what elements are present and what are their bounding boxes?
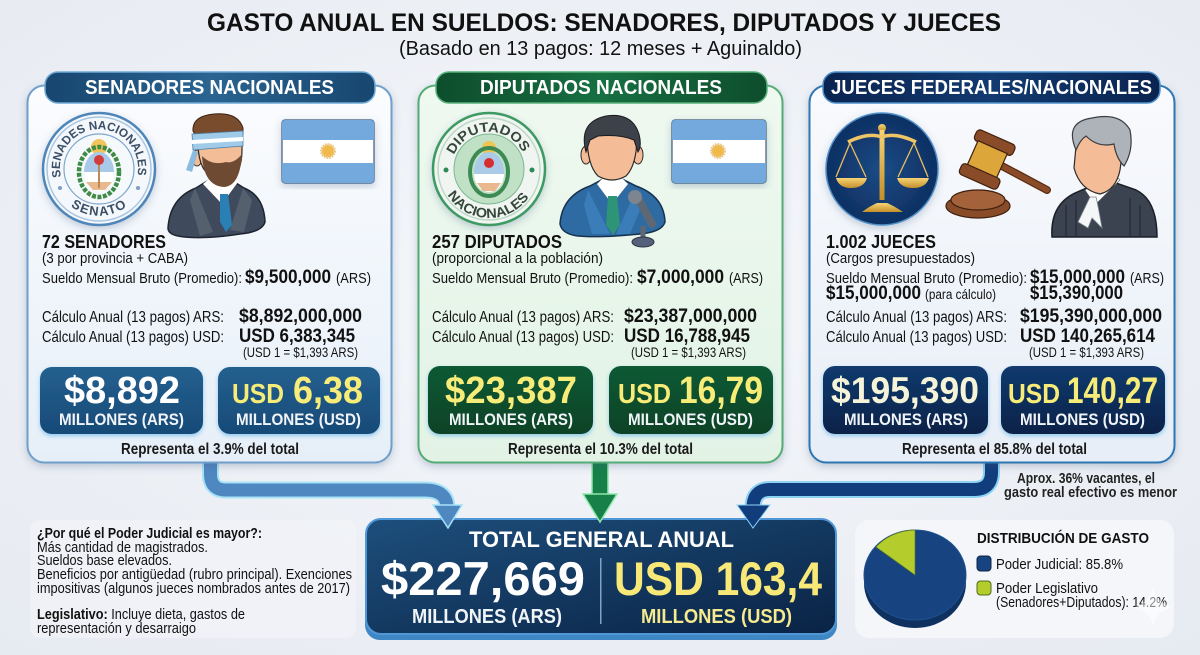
text: deputies annual calculation: Cálculo Anual (13 pagos) USD: xyxy=(432,329,614,346)
text: judges annual calculation xyxy=(826,306,1162,360)
stat: judges ARS xyxy=(823,366,988,434)
stat: total ARS: MILLONES (ARS) xyxy=(412,606,562,628)
stat: deputies ARS: $23,387 xyxy=(445,370,577,412)
legend: legislative: Poder Legislativo xyxy=(996,580,1098,597)
icon: senate seal: SENATO xyxy=(72,200,125,216)
stat: senators USD: 6,38 xyxy=(293,370,363,412)
stat: judges USD xyxy=(1001,366,1165,434)
icon: sparkle xyxy=(1134,587,1172,627)
text: senators monthly salary: Sueldo Mensual Bruto (Promedio): xyxy=(42,270,242,287)
stat: judges USD: MILLONES (USD) xyxy=(1020,410,1145,429)
text block: why the judiciary is higher: impositivas (algunos jueces nombrados antes de 2017) xyxy=(37,581,350,597)
text: deputies monthly salary xyxy=(432,267,763,288)
text: deputies annual calculation: $23,387,000,000 xyxy=(624,306,757,327)
text block: why the judiciary is higher: Sueldos base elevados. xyxy=(37,553,172,569)
stat: deputies USD: USD xyxy=(618,378,671,409)
text: senators monthly salary xyxy=(42,267,371,288)
stat: deputies ARS: MILLONES (ARS) xyxy=(449,410,573,429)
stat: total USD xyxy=(614,552,822,628)
note: vacancies xyxy=(1004,471,1177,501)
text: judges annual calculation: $195,390,000,000 xyxy=(1020,306,1162,327)
stat: senators ARS: MILLONES (ARS) xyxy=(59,410,184,429)
text: deputies count: 257 DIPUTADOS xyxy=(432,232,562,252)
note: vacancies: gasto real efectivo es menor xyxy=(1004,485,1177,501)
text: senators share: Representa el 3.9% del total xyxy=(121,441,299,458)
text: deputies monthly salary: Sueldo Mensual Bruto (Promedio): xyxy=(432,270,633,287)
text: senators annual calculation: $8,892,000,000 xyxy=(239,306,362,327)
text: senators annual calculation: (USD 1 = $1,393 ARS) xyxy=(243,344,358,360)
stat: total ARS xyxy=(381,552,585,628)
text: judges annual calculation: (USD 1 = $1,393 ARS) xyxy=(1029,344,1144,360)
icon: judge xyxy=(1052,116,1157,237)
panel: diputados xyxy=(413,71,788,470)
text: deputies share: Representa el 10.3% del total xyxy=(508,441,693,458)
text: judges monthly salary xyxy=(826,267,1164,304)
text: judges count: 1.002 JUECES xyxy=(826,232,936,252)
stat: senators ARS xyxy=(40,367,203,434)
header: jueces xyxy=(823,72,1160,103)
icon: scales of justice xyxy=(826,113,938,225)
panel: spending distribution xyxy=(855,520,1174,638)
text: deputies annual calculation: Cálculo Anual (13 pagos) ARS: xyxy=(432,309,614,326)
stat: total USD: USD 163,4 xyxy=(614,552,822,605)
text: senators annual calculation: Cálculo Anual (13 pagos) USD: xyxy=(42,329,224,346)
stat: judges ARS: $195,390 xyxy=(831,370,979,411)
stat: total ARS: $227,669 xyxy=(381,552,585,605)
header: jueces: JUECES FEDERALES/NACIONALES xyxy=(831,77,1152,99)
text: senators monthly salary: $9,500,000 xyxy=(245,267,331,288)
panel: senadores xyxy=(22,71,397,470)
text: deputies basis: (proporcional a la población) xyxy=(432,251,603,267)
legend: judicial: Poder Judicial: 85.8% xyxy=(996,556,1123,573)
stat: judges USD: 140,27 xyxy=(1067,370,1158,411)
header: diputados: DIPUTADOS NACIONALES xyxy=(480,77,722,99)
icon: deputies seal: NACIONALES xyxy=(448,190,528,218)
stat: senators ARS: $8,892 xyxy=(64,370,180,412)
stat: senators USD xyxy=(218,367,380,434)
panel: jueces xyxy=(810,72,1174,462)
stat: deputies USD: 16,79 xyxy=(679,370,763,412)
text: judges monthly salary: Sueldo Mensual Bruto (Promedio): xyxy=(826,270,1027,287)
text: judges monthly salary: (ARS) xyxy=(1130,271,1164,287)
text block: why the judiciary is higher: Beneficios por antigüedad (rubro principal). Exenciones xyxy=(37,567,352,583)
stat: deputies USD xyxy=(609,366,773,434)
text block: why the judiciary is higher: ¿Por qué el Poder Judicial es mayor?: xyxy=(37,526,262,542)
text: senators annual calculation xyxy=(42,306,362,360)
legend: legislative: (Senadores+Diputados): 14.2% xyxy=(996,595,1167,611)
text: judges annual calculation: Cálculo Anual (13 pagos) ARS: xyxy=(826,309,1007,326)
icon: argentine flag xyxy=(282,120,374,183)
heading: total: TOTAL GENERAL ANUAL xyxy=(469,527,734,552)
arrow: deputies to total xyxy=(583,458,617,522)
text block: why the judiciary is higher: Legislativo: Incluye dieta, gastos de xyxy=(37,607,245,623)
panel: total general xyxy=(365,519,837,640)
text: deputies annual calculation xyxy=(432,306,757,360)
text: judges monthly salary: $15,000,000 xyxy=(826,283,921,304)
subtitle: (Basado en 13 pagos: 12 meses + Aguinaldo) xyxy=(399,38,802,60)
icon: deputies seal: DIPUTADOS xyxy=(446,122,530,154)
icon: senator with headband xyxy=(168,114,265,238)
text: senators basis: (3 por provincia + CABA) xyxy=(42,251,188,267)
text: judges annual calculation: USD 140,265,614 xyxy=(1020,326,1155,347)
text: senators annual calculation: USD 6,383,345 xyxy=(239,326,355,347)
stat: deputies USD: MILLONES (USD) xyxy=(628,410,753,429)
legend: legislative xyxy=(977,580,1167,611)
stat: judges ARS: MILLONES (ARS) xyxy=(844,410,968,429)
text block: why the judiciary is higher: Más cantidad de magistrados. xyxy=(37,540,208,556)
stat: senators USD: MILLONES (USD) xyxy=(236,410,361,429)
text block: why the judiciary is higher xyxy=(30,520,356,638)
stat: deputies ARS xyxy=(428,366,593,434)
text: senators count: 72 SENADORES xyxy=(42,232,166,252)
icon: senate seal xyxy=(38,110,160,234)
note: vacancies: Aprox. 36% vacantes, el xyxy=(1017,471,1155,487)
pie chart xyxy=(864,530,966,628)
text: judges share: Representa el 85.8% del total xyxy=(902,441,1087,458)
stat: senators USD: USD xyxy=(232,378,284,409)
stat: total USD: MILLONES (USD) xyxy=(641,606,792,628)
icon: senate seal: SENADES NACIONALES xyxy=(52,121,146,178)
header: senadores: SENADORES NACIONALES xyxy=(85,77,334,99)
icon: deputies seal xyxy=(428,110,550,234)
text block: why the judiciary is higher: representación y desarraigo xyxy=(37,621,196,637)
header: senadores xyxy=(45,72,375,103)
text: senators annual calculation: Cálculo Anual (13 pagos) ARS: xyxy=(42,309,224,326)
text: judges annual calculation: Cálculo Anual (13 pagos) USD: xyxy=(826,329,1007,346)
icon: argentine flag xyxy=(672,120,766,183)
text: judges monthly salary: (para cálculo) xyxy=(925,287,996,302)
stat: judges USD: USD xyxy=(1008,378,1060,409)
text: deputies monthly salary: (ARS) xyxy=(729,271,763,287)
text: deputies annual calculation: USD 16,788,945 xyxy=(624,326,750,347)
text: judges monthly salary: $15,390,000 xyxy=(1030,283,1123,304)
icon: deputy with microphone xyxy=(560,115,665,247)
text: senators monthly salary: (ARS) xyxy=(336,271,371,287)
text: deputies monthly salary: $7,000,000 xyxy=(637,267,724,288)
icon: gavel xyxy=(946,129,1047,218)
arrow: senators to total xyxy=(210,458,462,528)
header: diputados xyxy=(436,72,767,103)
arrow: judges to total xyxy=(737,458,992,528)
text: deputies annual calculation: (USD 1 = $1,393 ARS) xyxy=(631,344,746,360)
text: judges basis: (Cargos presupuestados) xyxy=(826,251,975,267)
heading: legend: DISTRIBUCIÓN DE GASTO xyxy=(977,529,1149,547)
text: judges monthly salary: $15,000,000 xyxy=(1030,267,1125,288)
title: GASTO ANUAL EN SUELDOS: SENADORES, DIPUTADOS Y JUECES xyxy=(207,9,1001,37)
